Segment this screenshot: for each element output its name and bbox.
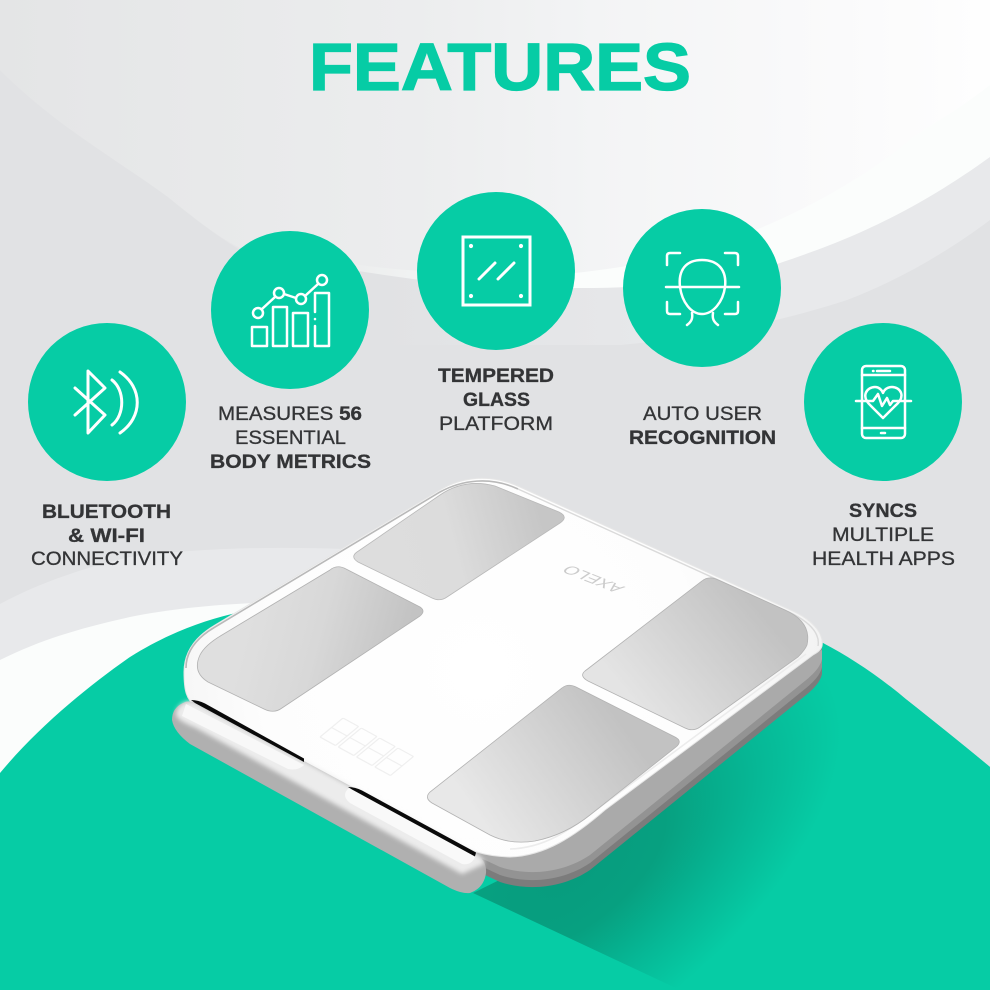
brand logo on scale: AXELO [558,562,629,595]
pad: bottom electrode [427,685,679,842]
handle electrode plates [182,704,304,770]
label: tempered glass platform: GLASS [463,390,530,411]
icon: bluetooth [28,323,186,481]
label: measures 56 essential body metrics: ESSENTIAL [235,428,346,449]
label: bluetooth and wi-fi [31,502,183,570]
feature: body metrics [210,231,371,473]
label: measures 56 essential body metrics [210,404,371,473]
label: auto user recognition: RECOGNITION [629,428,776,449]
pad: top electrode [354,483,564,600]
label: bluetooth and wi-fi: CONNECTIVITY [31,549,183,570]
feature: tempered glass [417,192,575,435]
label: syncs multiple health apps: MULTIPLE [832,525,934,546]
front handle bar [172,701,486,893]
feature: bluetooth and wi-fi [28,323,186,570]
handle slot right [348,787,476,856]
label: tempered glass platform [438,366,554,435]
icon: bar chart with trend [211,231,369,389]
pad: right electrode [583,578,808,730]
feature: auto user recognition [623,209,781,449]
label: syncs multiple health apps: HEALTH APPS [812,549,955,570]
title: FEATURES [309,30,691,105]
label: auto user recognition: AUTO USER [643,404,762,425]
scale top face [184,478,822,857]
icon: face scan [623,209,781,367]
label: measures 56 essential body metrics: MEASURES 56 [218,404,362,425]
icon: phone with heart [804,323,962,481]
label: tempered glass platform: TEMPERED [438,366,554,387]
smart scale [172,478,822,893]
handle slot left [191,700,304,762]
label: syncs multiple health apps [812,501,955,570]
scale side wall [470,648,822,887]
label: bluetooth and wi-fi: BLUETOOTH [42,502,171,523]
pad: left electrode [197,567,423,711]
label: auto user recognition [629,404,776,449]
green ground circle [0,560,990,990]
label: syncs multiple health apps: SYNCS [849,501,917,522]
label: measures 56 essential body metrics: BODY METRICS [210,452,371,473]
label: bluetooth and wi-fi: & WI-FI [68,526,145,547]
scale shadow on green [473,643,990,990]
label: tempered glass platform: PLATFORM [439,414,553,435]
icon: glass panel [417,192,575,350]
feature: health apps sync [804,323,962,570]
led display digits [320,718,413,776]
